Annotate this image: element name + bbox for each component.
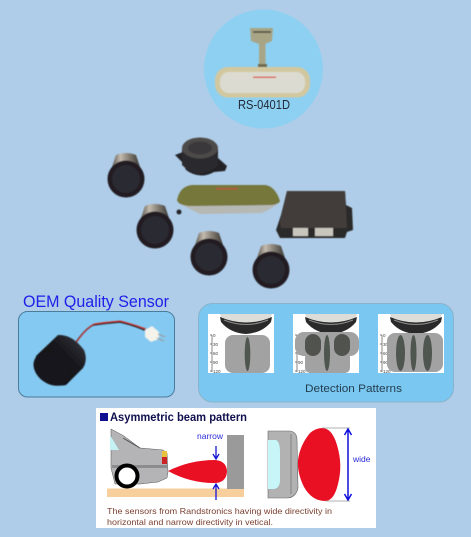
description text: The sensors from Randstronics having wide directivity in xyxy=(107,506,332,516)
ground strip xyxy=(107,488,244,497)
icon: mirror display unit xyxy=(176,185,280,214)
wall xyxy=(227,435,244,489)
heading: OEM Quality Sensor: OEM Quality Sensor xyxy=(23,293,169,311)
icon: control box xyxy=(276,191,353,238)
icon: sensor 4 xyxy=(252,244,290,288)
icon: car rear side view xyxy=(110,429,168,486)
icon: sensor 3 xyxy=(190,231,228,276)
panel: detection patterns xyxy=(198,304,454,402)
panel: mirror product circle xyxy=(204,10,323,128)
panel: OEM sensor photo xyxy=(18,312,174,397)
description text xyxy=(107,506,332,527)
icon: sensor 2 xyxy=(136,204,174,248)
description text: horizontal and narrow directivity in vetical. xyxy=(107,517,273,527)
icon: car rear top view xyxy=(268,431,298,498)
product kit: sensors, buzzer, display, control box xyxy=(108,138,353,288)
extent lines xyxy=(322,428,350,501)
icon: rear-view mirror xyxy=(215,28,310,98)
arrow: wide xyxy=(344,429,352,500)
icon: sensor 1 xyxy=(108,153,144,198)
caption: Detection Patterns: Detection Patterns xyxy=(305,383,403,395)
beam: rear view xyxy=(298,428,340,501)
panel: asymmetric beam pattern xyxy=(96,408,376,528)
model label: RS-0401D xyxy=(238,98,290,112)
heading icon: square bullet xyxy=(100,413,108,421)
chart: detection pattern 2 xyxy=(293,314,359,374)
arrow: narrow bottom xyxy=(213,484,219,500)
beam: side view xyxy=(168,460,227,483)
chart: detection pattern 3 xyxy=(378,314,444,374)
heading: Asymmetric beam pattern: Asymmetric beam pattern xyxy=(110,412,247,424)
arrow: narrow top xyxy=(213,446,219,459)
label: wide: wide xyxy=(352,454,371,464)
icon: ultrasonic sensor with cable xyxy=(27,321,165,393)
label: narrow: narrow xyxy=(197,431,224,441)
icon: buzzer xyxy=(175,138,227,176)
chart: detection pattern 1 xyxy=(208,314,274,374)
